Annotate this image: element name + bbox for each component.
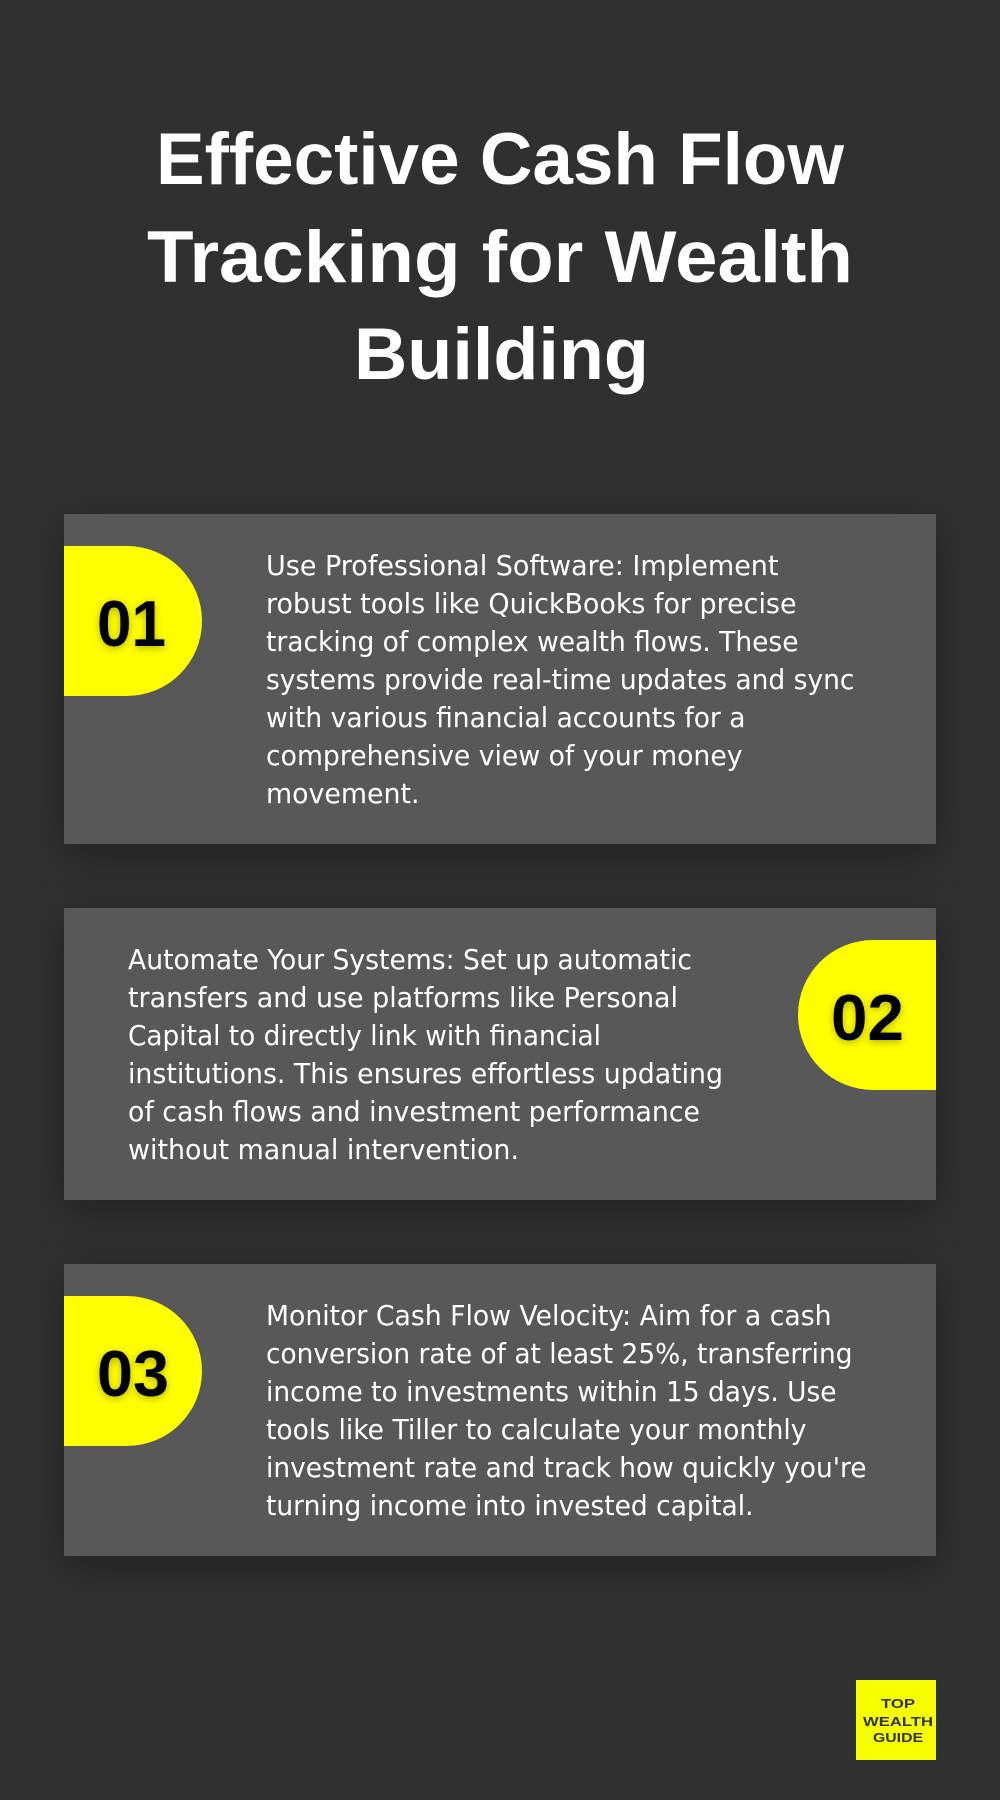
text: step 2 description: Capital to directly link with financial	[128, 1019, 601, 1052]
text: step 2 description	[128, 943, 723, 1166]
logo: top wealth guide: GUIDE	[873, 1731, 923, 1745]
panel: step 3 monitor cash flow velocity	[64, 1264, 936, 1556]
text: step 1 description	[266, 549, 854, 810]
text: step 3 description: conversion rate of at least 25%, transferring	[266, 1337, 852, 1370]
badge: 02: 02	[831, 981, 904, 1054]
text: step 2 description: institutions. This ensures effortless updating	[128, 1057, 723, 1090]
text: step 3 description: income to investments within 15 days. Use	[266, 1375, 836, 1408]
text: step 1 description: robust tools like QuickBooks for precise	[266, 587, 796, 620]
text: step 3 description: turning income into invested capital.	[266, 1489, 753, 1522]
text: step 1 description: movement.	[266, 777, 419, 810]
text: step 2 description: Automate Your Systems: Set up automatic	[128, 943, 692, 976]
text: step 2 description: of cash flows and investment performance	[128, 1095, 700, 1128]
logo: top wealth guide	[856, 1680, 936, 1760]
badge: 03: 03	[97, 1337, 169, 1410]
panel: step 2 automate your systems	[64, 908, 936, 1200]
title	[147, 119, 853, 395]
badge: 02	[798, 940, 936, 1090]
logo: top wealth guide: WEALTH	[863, 1715, 933, 1729]
text: step 3 description: tools like Tiller to calculate your monthly	[266, 1413, 806, 1446]
text: step 1 description: systems provide real-time updates and sync	[266, 663, 854, 696]
text: step 1 description: comprehensive view of your money	[266, 739, 742, 772]
title: Building	[354, 314, 649, 395]
badge: 03	[64, 1296, 202, 1446]
text: step 2 description: without manual intervention.	[128, 1133, 519, 1166]
text: step 3 description	[266, 1299, 866, 1522]
text: step 3 description: Monitor Cash Flow Velocity: Aim for a cash	[266, 1299, 831, 1332]
text: step 1 description: Use Professional Software: Implement	[266, 549, 778, 582]
title: Tracking for Wealth	[147, 217, 853, 298]
logo: top wealth guide: TOP	[881, 1697, 915, 1711]
text: step 1 description: with various financial accounts for a	[266, 701, 745, 734]
badge: 01: 01	[97, 587, 166, 660]
title: Effective Cash Flow	[156, 119, 844, 200]
text: step 3 description: investment rate and track how quickly you're	[266, 1451, 866, 1484]
badge: 01	[64, 546, 202, 696]
panel: step 1 use professional software	[64, 514, 936, 844]
text: step 2 description: transfers and use platforms like Personal	[128, 981, 678, 1014]
text: step 1 description: tracking of complex wealth flows. These	[266, 625, 798, 658]
